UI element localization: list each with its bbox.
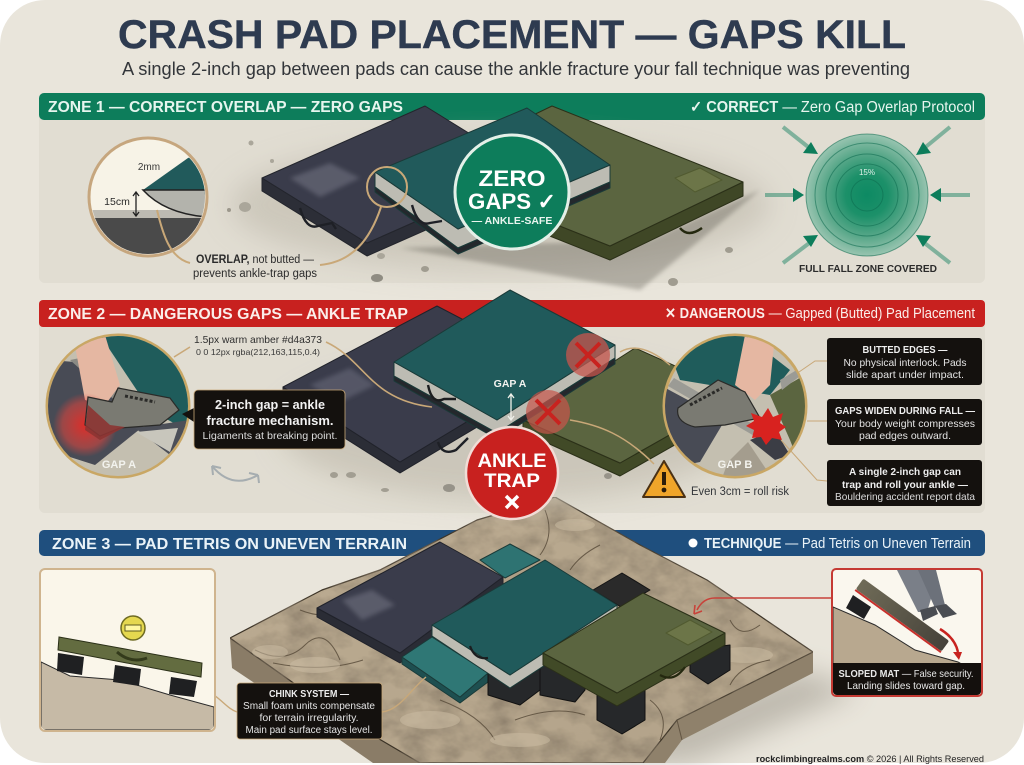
zone 2: ankle fracture callout: fracture mechanism.: [206, 413, 334, 428]
zone 3 header bar: TECHNIQUE — Pad Tetris on Uneven Terrain: [704, 536, 971, 552]
callout: gaps widen: GAPS WIDEN DURING FALL —: [835, 405, 975, 417]
callout: butted edges: No physical interlock. Pads: [844, 357, 966, 369]
zone 2: amber note: [194, 334, 322, 357]
zone 1: overlap caption: [193, 254, 317, 280]
zone 2: ankle fracture callout: 2-inch gap = ankle: [215, 397, 325, 412]
zone 2: ankle fracture callout: Ligaments at breaking point.: [202, 430, 338, 442]
callout: single gap: trap and roll your ankle —: [842, 479, 968, 491]
zone 1 header bar: ZONE 1 — CORRECT OVERLAP — ZERO GAPS: [48, 99, 403, 116]
callout: single gap: Bouldering accident report data: [835, 491, 975, 503]
zone 1: fall zone caption: FULL FALL ZONE COVERED: [799, 263, 937, 275]
zone 1: overlap caption: OVERLAP, not butted —: [196, 254, 314, 266]
arrow: slide direction: [940, 629, 958, 652]
zone 3: chink system callout: Small foam units compensate: [243, 701, 375, 712]
label: 2mm: 2mm: [138, 162, 160, 173]
callout: butted edges: BUTTED EDGES —: [862, 344, 948, 356]
zone 3: chink system callout: [200, 677, 426, 739]
zone 2: amber note: 1.5px warm amber #d4a373: [194, 334, 322, 346]
zone 3: chink system callout: Main pad surface stays level.: [246, 725, 372, 736]
zone 1: fall zone target: [806, 134, 928, 256]
zone 1 header bar: ✓ CORRECT — Zero Gap Overlap Protocol: [690, 99, 975, 116]
zone 2: warning icon and note: Even 3cm = roll risk: [691, 486, 789, 498]
zone 2: ankle trap badge: [466, 427, 558, 519]
callout: single gap: [827, 460, 982, 506]
zone 2: gap markers: [494, 333, 610, 434]
zone 1: ground and dust: [227, 140, 770, 290]
icon: spirit level: [121, 616, 145, 640]
zone 2: gapped crash pads: [283, 290, 740, 476]
chink: black foam block rear: [593, 573, 650, 607]
pad: olive: [523, 348, 740, 476]
callout: gaps widen: Your body weight compresses: [835, 418, 975, 430]
chink: teal rear: [480, 544, 540, 578]
pad: olive: [419, 106, 743, 260]
marker: red cross lower: [526, 390, 570, 434]
zone 2: amber connectors to right callouts: [781, 361, 827, 481]
zone 1: amber leader lines: [157, 207, 381, 265]
callout: butted edges: [827, 338, 982, 385]
label: gap A: GAP A: [494, 378, 527, 390]
callout: single gap: A single 2-inch gap can: [849, 466, 961, 478]
olive pad: [58, 637, 202, 677]
zone 3: right inset, sloped mat warning: Landing slides toward gap.: [847, 680, 965, 692]
chink blocks: [488, 645, 730, 734]
zone 3 header bar: [39, 530, 985, 556]
zone 3: rock slab terrain: [230, 497, 860, 763]
zone 1: inward arrows: [765, 127, 970, 263]
zone 1: zero gaps badge: — ANKLE-SAFE: [472, 215, 552, 227]
chink: teal front: [402, 637, 488, 703]
panel backgrounds: [39, 110, 985, 513]
zone 2: amber leader to gap marker: [570, 348, 670, 464]
zone 1: amber ring on overlap: [367, 167, 407, 207]
zone 1: fall zone target: 15%: [859, 168, 875, 177]
label: gap B: GAP B: [718, 459, 752, 471]
zone 1: zero gaps badge: ZERO: [478, 166, 546, 191]
pad: dark grey: [283, 306, 556, 473]
marker: red cross upper: [566, 333, 610, 377]
zone 3: red leader arrow from sloped mat: [694, 598, 832, 614]
zone 1: zero gaps badge: GAPS ✓: [468, 189, 556, 214]
zone 2: warning icon and note: [643, 461, 789, 498]
zone 3: left inset, chink leveling diagram: [40, 569, 215, 731]
zone 2: rotation arrow: [212, 466, 259, 483]
pad: teal: [394, 290, 615, 439]
mat slab: [855, 579, 949, 653]
climber legs: [897, 570, 957, 621]
pad: olive: [543, 593, 725, 706]
label: 15cm: 15cm: [104, 196, 130, 208]
pad: teal main: [432, 560, 617, 688]
callout: gaps widen: [827, 399, 982, 445]
black chink: [846, 595, 871, 619]
zone 2: ground and dust: [280, 360, 740, 500]
zone 1: inset detail circle: [85, 138, 215, 258]
zone 2 header bar: ZONE 2 — DANGEROUS GAPS — ANKLE TRAP: [48, 306, 408, 323]
arrow: thickness: [133, 192, 139, 216]
zone 3: pad tetris stack: [317, 542, 730, 734]
chink blocks: [57, 653, 197, 697]
label: gap A: GAP A: [102, 459, 136, 471]
callout: gaps widen: pad edges outward.: [859, 430, 951, 442]
zone 2 header bar: ✕ DANGEROUS — Gapped (Butted) Pad Placement: [665, 306, 975, 322]
zone 2: left inset, ankle roll: [47, 335, 190, 478]
zone 3: right inset, sloped mat warning: SLOPED MAT — False security.: [838, 668, 974, 680]
pad: dark grey: [262, 106, 530, 256]
zone 1 header bar: [39, 93, 985, 120]
zone 2: right inset, gap impact: [660, 335, 806, 478]
zone 2: ankle trap badge: ANKLE: [478, 451, 546, 472]
zone 2 header bar: [39, 300, 985, 327]
zone 1: zero gaps badge: [455, 135, 569, 249]
zone 3: chink system callout: for terrain irregularity.: [260, 713, 358, 724]
pad: teal with exposed foam edge: [375, 108, 610, 254]
zone 1: overlap caption: prevents ankle-trap gaps: [193, 268, 317, 280]
zone 2: amber note: 0 0 12px rgba(212,163,115,0.4): [196, 347, 320, 357]
title: CRASH PAD PLACEMENT — GAPS KILL: [118, 13, 906, 57]
icon: impact burst: [746, 408, 786, 445]
zone 3: chink system callout: CHINK SYSTEM —: [269, 689, 349, 700]
zone 3: right inset, sloped mat warning: [832, 569, 982, 696]
subtitle: A single 2-inch gap between pads can cause the ankle fracture your fall technique was preventing: [122, 58, 910, 79]
footer credit: rockclimbingrealms.com © 2026 | All Rights Reserved: [756, 754, 984, 765]
zone 2: amber leader lines: [174, 342, 432, 407]
zone 1: three overlapping crash pads: [262, 106, 743, 260]
arrow: gap width: [508, 394, 514, 420]
zone 2: ankle trap badge: TRAP: [484, 471, 540, 492]
pad: dark grey: [317, 542, 503, 663]
zone 2: ankle fracture callout: [182, 390, 345, 449]
callout: butted edges: slide apart under impact.: [846, 369, 964, 381]
zone 3 header bar: ZONE 3 — PAD TETRIS ON UNEVEN TERRAIN: [52, 536, 407, 553]
